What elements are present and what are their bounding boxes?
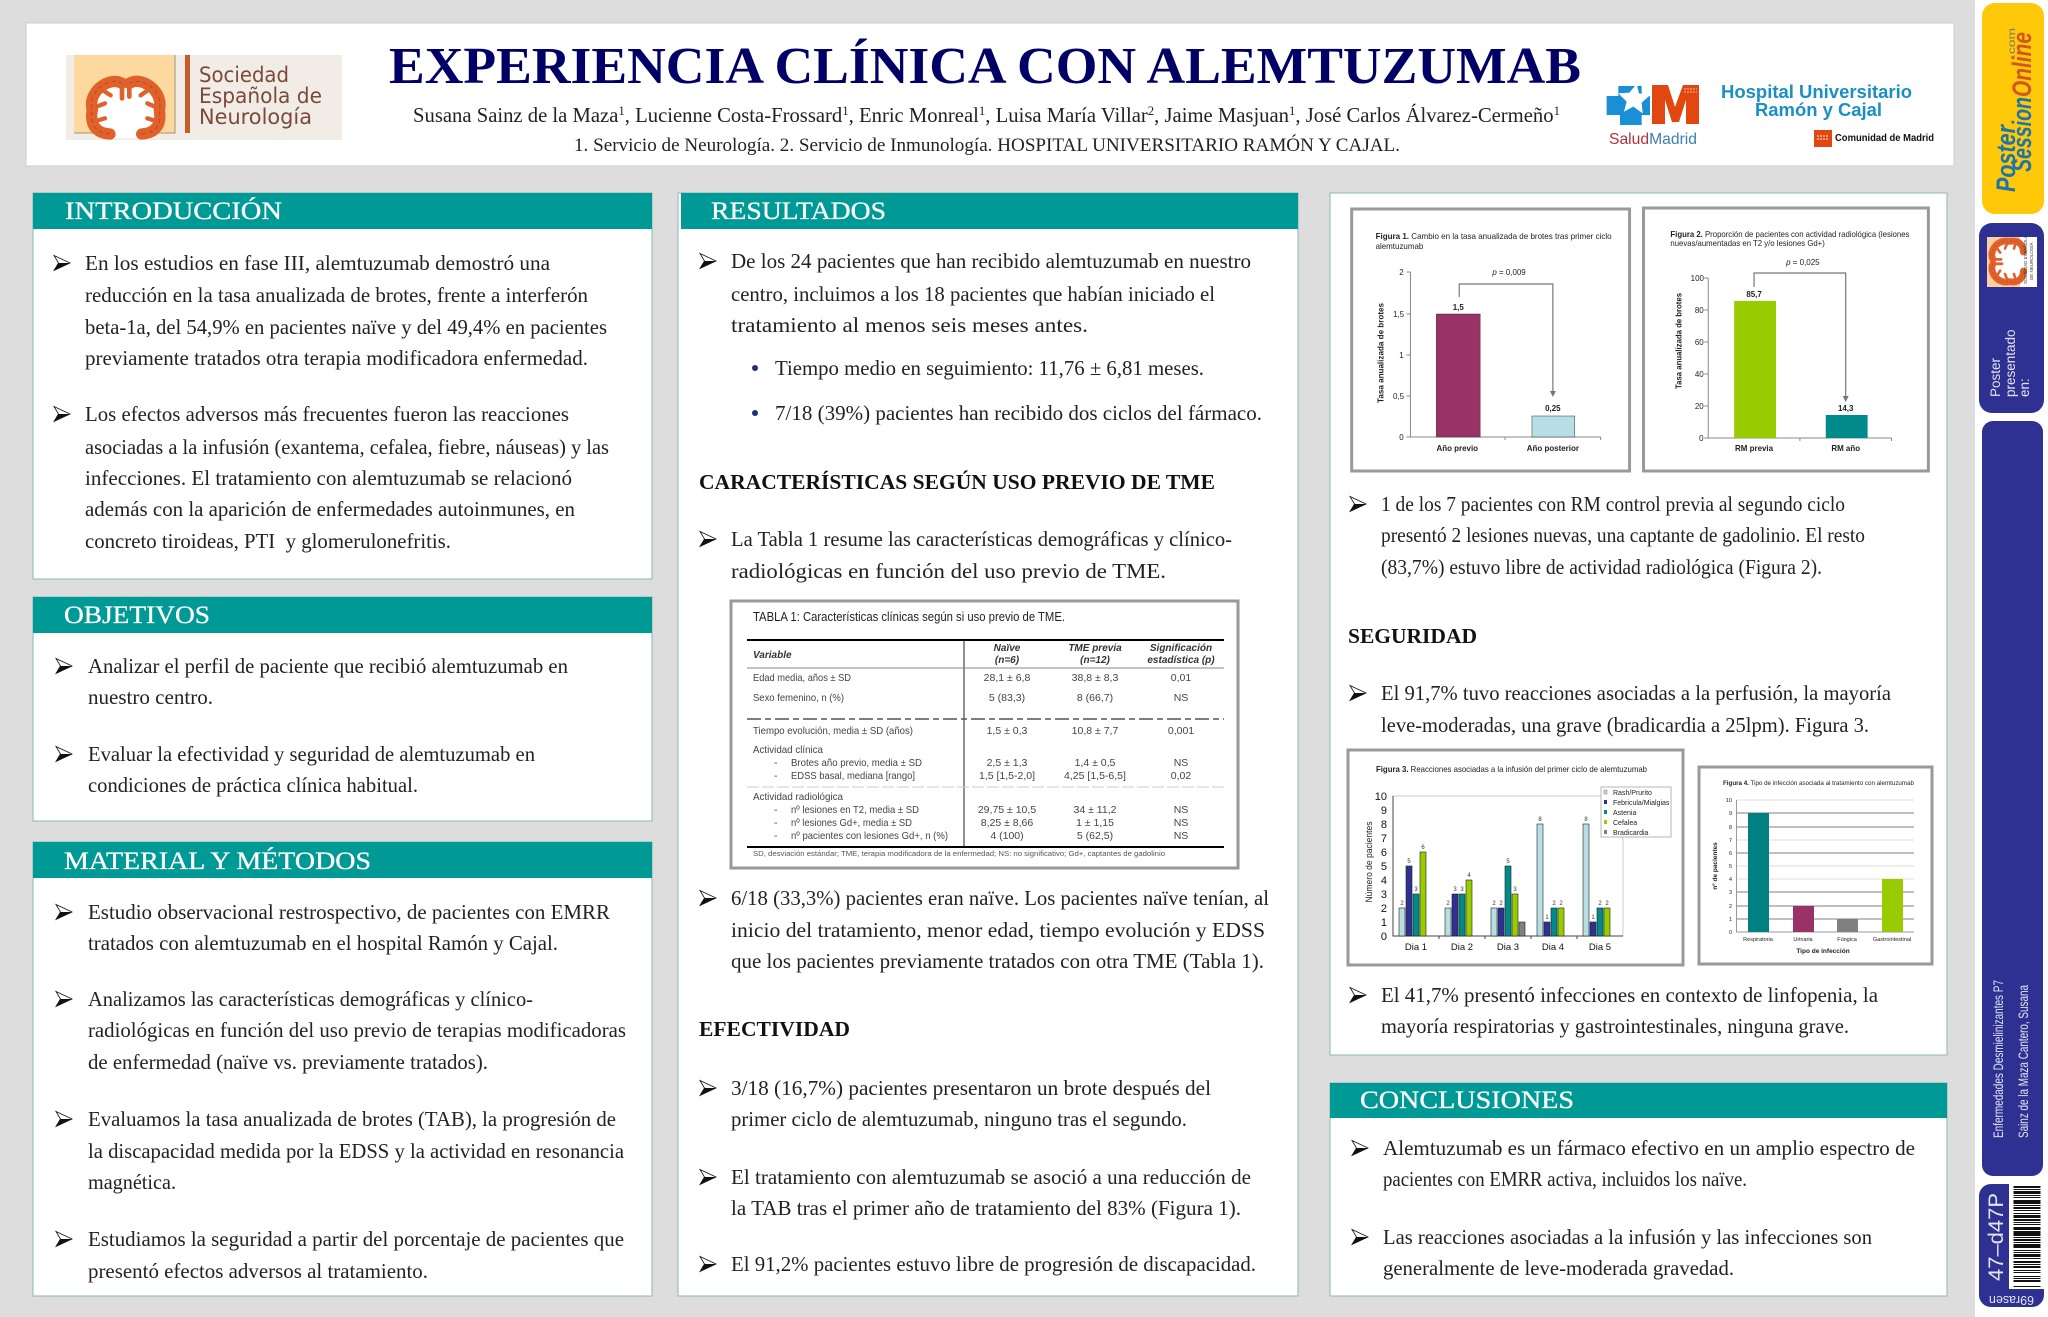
- sidebar: poster presentado en: presentado: [2003, 329, 2018, 397]
- chart: figura 3: 4: [1381, 875, 1387, 887]
- heading: introducción: [33, 193, 652, 229]
- text: conclusión 1: pacientes con EMRR activa, incluidos los naïve.: [1383, 1167, 1747, 1191]
- chart: figura 3: 2: [1446, 901, 1450, 907]
- text: pacientes naïve: [700, 886, 1269, 973]
- text: seguridad: leve-moderadas, una grave (bradicardia a 25lpm). Figura 3.: [1381, 713, 1869, 737]
- chart: figura 3: 8: [1381, 819, 1387, 831]
- chart: figura 4: Fúngica: [1837, 937, 1858, 943]
- sidebar: PosterSessionOnline badge: Online: [2007, 32, 2037, 97]
- text: método 3: magnética.: [88, 1170, 176, 1194]
- chart: figura 2: RM año: [1831, 444, 1860, 453]
- table 1: NS: [1174, 692, 1188, 704]
- logo: Hospital Universitario Ramón y Cajal: Ramón y Cajal: [1755, 100, 1882, 120]
- text: radiología: [1350, 492, 1865, 579]
- legend: figura 3: Bradicardia: [1613, 830, 1649, 837]
- table 1: 1,4 ± 0,5: [1075, 757, 1116, 769]
- chart: figura 3: 0: [1381, 931, 1387, 943]
- chart: figura 2: 20: [1695, 402, 1704, 411]
- sidebar: PosterSessionOnline badge: Session: [2007, 97, 2037, 172]
- table 1: 1,5 ± 0,3: [987, 725, 1028, 737]
- text: intro paragraph 2: concreto tiroideas, PTI y glomerulonefritis.: [85, 529, 451, 553]
- subheading: efectividad: EFECTIVIDAD: [699, 1017, 850, 1041]
- table 1: NS: [1174, 830, 1188, 842]
- heading: objetivos: [33, 597, 652, 633]
- chart: figura 1: 0,25: [1545, 404, 1561, 413]
- chart: figura 3: Dia 2: [1451, 942, 1473, 953]
- logo: Hospital Universitario Ramón y Cajal: Comunidad de Madrid: [1835, 133, 1934, 144]
- chart: figura 2: 60: [1695, 338, 1704, 347]
- logo: SaludMadrid: SaludMadrid: [1609, 131, 1697, 148]
- text: intro paragraph 2: infecciones. El tratamiento con alemtuzumab se relacionó: [85, 466, 572, 490]
- text: efectividad 1: primer ciclo de alemtuzumab, ninguno tras el segundo.: [731, 1107, 1187, 1131]
- sidebar: sesión y autora: [1982, 421, 2043, 1176]
- table 1: nº lesiones en T2, media ± SD: [791, 804, 919, 816]
- chart: figura 3: 8: [1538, 817, 1542, 823]
- table 1: 1,5 [1,5-2,0]: [979, 770, 1035, 782]
- chart: figura 3: Figura 3. Reacciones asociadas a la infusión del primer ciclo de alemtuzumab: [1376, 764, 1647, 774]
- text: método 3: la discapacidad medida por la EDSS y la actividad en resonancia: [88, 1139, 625, 1163]
- text: resultados paragraph: centro, incluimos a los 18 pacientes que habían iniciado el: [731, 282, 1215, 306]
- sidebar: PosterSessionOnline badge: [1982, 3, 2044, 214]
- chart: figura 4: 2: [1729, 904, 1732, 910]
- chart: figura 2: RM previa: [1735, 444, 1774, 453]
- chart: figura 4: 7: [1729, 838, 1732, 844]
- chart: figura 3: 3: [1381, 889, 1387, 901]
- table 1: NS: [1174, 804, 1188, 816]
- table 1: 8,25 ± 8,66: [981, 817, 1033, 829]
- authors: 1: [1554, 103, 1560, 118]
- text: método 3: [56, 1107, 625, 1194]
- chart: figura 2: p = 0,025: [1785, 258, 1820, 267]
- chart: figura 2: 0: [1699, 434, 1704, 443]
- legend: figura 3: Febricula/Mialgias: [1613, 800, 1670, 807]
- text: pacientes naïve: 6/18 (33,3%) pacientes eran naïve. Los pacientes naïve tenían, al: [731, 886, 1269, 910]
- text: conclusión 2: [1352, 1225, 1872, 1280]
- chart: figura 2: 40: [1695, 370, 1704, 379]
- text: intro paragraph 2: Los efectos adversos más frecuentes fueron las reacciones: [85, 402, 569, 426]
- sidebar: poster presentado en: DE NEUROLOGÍA: [2028, 242, 2034, 280]
- table 1: 28,1 ± 6,8: [984, 672, 1030, 684]
- heading: conclusiones: [1330, 1083, 1947, 1118]
- subheading: características: CARACTERÍSTICAS SEGÚN USO PREVIO DE TME: [699, 470, 1215, 494]
- chart: figura 1: Año previo: [1436, 444, 1478, 453]
- text: sub-bullets: Tiempo medio en seguimiento: 11,76 ± 6,81 meses.: [775, 356, 1204, 380]
- chart: figura 4: Tipo de infección: [1796, 948, 1850, 955]
- table 1: -: [774, 817, 778, 829]
- text: efectividad 2: la TAB tras el primer año de tratamiento del 83% (Figura 1).: [731, 1196, 1241, 1220]
- table 1: Brotes año previo, media ± SD: [791, 757, 922, 769]
- text: intro paragraph 1: previamente tratados otra terapia modificadora enfermedad.: [85, 346, 588, 370]
- text: método 1: tratados con alemtuzumab en el hospital Ramón y Cajal.: [88, 931, 558, 955]
- text: radiología: presentó 2 lesiones nuevas, una captante de gadolinio. El resto: [1381, 523, 1865, 547]
- table 1: 4 (100): [990, 830, 1024, 842]
- text: pacientes naïve: inicio del tratamiento, menor edad, tiempo evolución y EDSS: [731, 918, 1265, 942]
- heading: material y métodos: MATERIAL Y MÉTODOS: [64, 847, 371, 875]
- table 1: 34 ± 11,2: [1074, 804, 1117, 816]
- text: efectividad 1: [700, 1076, 1211, 1131]
- logo: Sociedad Española de Neurología: Española de: [199, 84, 322, 108]
- chart: figura 2: Tasa anualizada de brotes: [1674, 292, 1683, 389]
- chart: figura 2: 80: [1695, 306, 1704, 315]
- sidebar: poster presentado en: SOCIEDAD ESPAÑOLA: [2022, 235, 2028, 284]
- chart: figura 3: 2: [1559, 901, 1563, 907]
- chart: figura 4: 6: [1729, 851, 1732, 857]
- affiliations: 1. Servicio de Neurología. 2. Servicio de Inmunología. HOSPITAL UNIVERSITARIO RAMÓN Y CAJAL.: [574, 134, 1400, 156]
- panel: conclusiones: [1330, 1083, 1947, 1296]
- chart: figura 3: Dia 3: [1497, 942, 1519, 953]
- heading: introducción: INTRODUCCIÓN: [65, 197, 282, 225]
- chart: figura 4: Urinaria: [1793, 937, 1814, 943]
- chart: figura 4: 3: [1729, 890, 1732, 896]
- chart: figura 3: 5: [1506, 859, 1510, 865]
- text: intro paragraph 1: [54, 251, 607, 370]
- authors: , Jaime Masjuan: [1154, 103, 1290, 127]
- chart: figura 3: 2: [1400, 901, 1404, 907]
- text: método 3: Evaluamos la tasa anualizada de brotes (TAB), la progresión de: [88, 1107, 616, 1131]
- table 1: estadística (p): [1147, 655, 1215, 666]
- table 1: nº pacientes con lesiones Gd+, n (%): [791, 830, 948, 842]
- text: radiología: (83,7%) estuvo libre de actividad radiológica (Figura 2).: [1381, 555, 1822, 579]
- chart: figura 3: 2: [1492, 901, 1496, 907]
- sidebar: poster presentado en: Poster: [1988, 357, 2003, 397]
- table 1: [731, 601, 1238, 868]
- logo: Hospital Universitario Ramón y Cajal: Hospital Universitario: [1721, 82, 1912, 102]
- legend: figura 3: Rash/Prurito: [1613, 790, 1652, 797]
- sidebar: poster presentado en: [1979, 223, 2044, 413]
- chart: figura 3: 5: [1381, 861, 1387, 873]
- heading: resultados: [681, 193, 1298, 229]
- legend: figura 3: Astenia: [1613, 810, 1636, 817]
- text: método 4: Estudiamos la seguridad a partir del porcentaje de pacientes que: [88, 1227, 624, 1251]
- text: método 4: presentó efectos adversos al tratamiento.: [88, 1259, 428, 1283]
- chart: figura 3: 2: [1598, 901, 1602, 907]
- text: intro paragraph 2: [54, 402, 609, 553]
- text: intro paragraph 1: beta-1a, del 54,9% en pacientes naïve y del 49,4% en pacientes: [85, 315, 607, 339]
- header banner: [26, 23, 1954, 166]
- text: infecciones: El 41,7% presentó infecciones en contexto de linfopenia, la: [1381, 983, 1879, 1007]
- text: objetivo 2: condiciones de práctica clínica habitual.: [88, 773, 418, 797]
- text: resultados paragraph: tratamiento al menos seis meses antes.: [731, 313, 1088, 337]
- text: método 2: [56, 987, 626, 1074]
- table 1: nº lesiones Gd+, media ± SD: [791, 817, 912, 829]
- text: objetivo 2: Evaluar la efectividad y seguridad de alemtuzumab en: [88, 742, 535, 766]
- chart: figura 3: 7: [1381, 833, 1387, 845]
- table 1: Significación: [1150, 643, 1212, 654]
- table 1: 0,02: [1171, 770, 1191, 782]
- sidebar: barcode: [1979, 1184, 2044, 1308]
- text: efectividad 1: 3/18 (16,7%) pacientes presentaron un brote después del: [731, 1076, 1211, 1100]
- table 1: 8 (66,7): [1077, 692, 1113, 704]
- authors: 1: [618, 103, 625, 118]
- text: tabla 1 intro: radiológicas en función del uso previo de TME.: [731, 559, 1166, 583]
- title: EXPERIENCIA CLÍNICA CON ALEMTUZUMAB: [389, 37, 1581, 95]
- authors: 1: [979, 103, 985, 118]
- table 1: EDSS basal, mediana [rango]: [791, 770, 915, 782]
- text: infecciones: [1350, 983, 1879, 1038]
- chart: figura 1: 1,5: [1393, 310, 1405, 319]
- authors: 2: [1148, 103, 1154, 118]
- text: objetivo 2: [56, 742, 535, 797]
- chart: figura 2: 85,7: [1746, 290, 1762, 299]
- authors: , Luisa María Villar: [985, 103, 1148, 127]
- table 1: Naïve: [994, 643, 1021, 654]
- table 1: Tiempo evolución, media ± SD (años): [753, 725, 913, 737]
- text: método 1: Estudio observacional restrospectivo, de pacientes con EMRR: [88, 900, 610, 924]
- table 1: 1 ± 1,15: [1076, 817, 1114, 829]
- table 1: -: [774, 830, 778, 842]
- panel: objetivos: [33, 597, 652, 821]
- text: sub-bullets: 7/18 (39%) pacientes han recibido dos ciclos del fármaco.: [775, 401, 1262, 425]
- panel: resultados continuación: [1330, 193, 1947, 1055]
- table 1: 0,01: [1171, 672, 1191, 684]
- text: método 4: [56, 1227, 624, 1283]
- text: resultados paragraph: De los 24 pacientes que han recibido alemtuzumab en nuestro: [731, 249, 1251, 273]
- chart: figura 3: 10: [1375, 791, 1387, 803]
- sidebar: sesión y autora: Enfermedades Desmielinizantes P7: [1990, 980, 2006, 1138]
- chart: figura 3: Dia 4: [1542, 942, 1564, 953]
- chart: figura 3: 3: [1414, 887, 1418, 893]
- table 1: 5 (83,3): [989, 692, 1025, 704]
- authors: , Enric Monreal: [849, 103, 979, 127]
- chart: figura 3: Dia 5: [1589, 942, 1611, 953]
- chart: figura 4: 8: [1729, 825, 1732, 831]
- chart: figura 2: Figura 2. Proporción de pacientes con actividad radiológica (lesiones: [1670, 230, 1909, 239]
- table 1: 2,5 ± 1,3: [987, 757, 1028, 769]
- text: conclusión 2: generalmente de leve-moderada gravedad.: [1383, 1256, 1734, 1280]
- chart: figura 1: [1352, 209, 1630, 471]
- chart: figura 3: Dia 1: [1405, 942, 1427, 953]
- text: efectividad 2: El tratamiento con alemtuzumab se asoció a una reducción de: [731, 1165, 1251, 1189]
- chart: figura 4: 9: [1729, 811, 1732, 817]
- chart: figura 3: 3: [1453, 887, 1457, 893]
- text: método 2: Analizamos las características demográficas y clínico-: [88, 987, 533, 1011]
- legend: figura 3: [1601, 787, 1671, 837]
- table 1: 0,001: [1168, 725, 1194, 737]
- table 1: NS: [1174, 817, 1188, 829]
- chart: figura 3: 9: [1381, 805, 1387, 817]
- table 1: SD, desviación estándar; TME, terapia modificadora de la enfermedad; NS: no significativo; Gd+, captantes de gadolinio: [753, 849, 1165, 858]
- chart: figura 1: p = 0,009: [1491, 268, 1526, 277]
- chart: figura 3: 2: [1605, 901, 1609, 907]
- chart: figura 2: 14,3: [1838, 404, 1854, 413]
- chart: figura 3: 6: [1381, 847, 1387, 859]
- table 1: -: [774, 804, 778, 816]
- table 1: -: [774, 770, 778, 782]
- table 1: Actividad radiológica: [753, 791, 843, 803]
- legend: figura 3: Cefalea: [1613, 820, 1637, 827]
- table 1: (n=12): [1080, 655, 1111, 666]
- text: conclusión 1: Alemtuzumab es un fármaco efectivo en un amplio espectro de: [1383, 1136, 1915, 1160]
- table 1: TME previa: [1068, 643, 1122, 654]
- authors: Susana Sainz de la Maza: [413, 103, 622, 127]
- chart: figura 3: 8: [1584, 817, 1588, 823]
- chart: figura 4: Figura 4. Tipo de infección asociada al tratamiento con alemtuzumab: [1723, 781, 1915, 787]
- logo: Sociedad Española de Neurología: Neurología: [199, 105, 312, 129]
- chart: figura 3: Número de pacientes: [1364, 821, 1375, 902]
- chart: figura 1: 0: [1399, 433, 1404, 442]
- heading: resultados: RESULTADOS: [711, 198, 886, 225]
- text: efectividad 3: El 91,2% pacientes estuvo libre de progresión de discapacidad.: [731, 1252, 1256, 1276]
- authors: , José Carlos Álvarez-Cermeño: [1295, 103, 1554, 127]
- chart: figura 1: 2: [1399, 268, 1404, 277]
- chart: figura 2: 100: [1691, 274, 1704, 283]
- chart: figura 3: 2: [1381, 903, 1387, 915]
- table 1: (n=6): [995, 655, 1020, 666]
- chart: figura 1: alemtuzumab: [1376, 242, 1424, 251]
- table 1: Variable: [753, 650, 792, 661]
- authors: 1: [842, 103, 849, 118]
- chart: figura 3: 1: [1545, 915, 1549, 921]
- chart: figura 3: 6: [1421, 845, 1425, 851]
- text: método 1: [56, 900, 610, 955]
- panel: introducción: [33, 193, 652, 579]
- chart: figura 1: Tasa anualizada de brotes: [1377, 302, 1386, 403]
- text: método 2: de enfermedad (naïve vs. previamente tratados).: [88, 1050, 488, 1074]
- chart: figura 3: 5: [1407, 859, 1411, 865]
- text: tabla 1 intro: La Tabla 1 resume las características demográficas y clínico-: [731, 527, 1232, 551]
- chart: figura 3: 3: [1460, 887, 1464, 893]
- logo: SaludMadrid: [1607, 84, 1699, 148]
- sidebar: barcode: 69rasen: [1989, 1293, 2034, 1308]
- logo: Hospital Universitario Ramón y Cajal: [1721, 82, 1934, 147]
- sidebar: poster presentado en: en:: [2017, 378, 2032, 397]
- chart: figura 1: Año posterior: [1527, 444, 1579, 453]
- chart: figura 4: 0: [1729, 930, 1732, 936]
- text: infecciones: mayoría respiratorias y gastrointestinales, ninguna grave.: [1381, 1014, 1849, 1038]
- text: pacientes naïve: que los pacientes previamente tratados con otra TME (Tabla 1).: [731, 949, 1264, 973]
- heading: objetivos: OBJETIVOS: [64, 602, 210, 629]
- chart: figura 3: 2: [1499, 901, 1503, 907]
- chart: figura 1: 0,5: [1393, 392, 1405, 401]
- chart: figura 2: nuevas/aumentadas en T2 y/o lesiones Gd+): [1670, 239, 1825, 248]
- table 1: 5 (62,5): [1077, 830, 1113, 842]
- text: objetivo 1: [56, 654, 568, 709]
- logo: Sociedad Española de Neurología: [66, 55, 342, 140]
- sidebar: barcode: 47–d47P: [1985, 1193, 2008, 1281]
- heading: conclusiones: CONCLUSIONES: [1360, 1087, 1574, 1114]
- table 1: Sexo femenino, n (%): [753, 692, 844, 704]
- text: conclusión 1: [1352, 1136, 1915, 1191]
- text: radiología: 1 de los 7 pacientes con RM control previa al segundo ciclo: [1381, 492, 1845, 516]
- text: método 2: radiológicas en función del uso previo de terapias modificadoras: [88, 1018, 626, 1042]
- chart: figura 3: 1: [1591, 915, 1595, 921]
- table 1: 29,75 ± 10,5: [978, 804, 1036, 816]
- chart: figura 2: [1644, 208, 1928, 471]
- subheading: seguridad: SEGURIDAD: [1348, 624, 1477, 648]
- chart: figura 4: 10: [1726, 798, 1732, 804]
- text: efectividad 2: [700, 1165, 1251, 1220]
- text: intro paragraph 2: asociadas a la infusión (exantema, cefalea, fiebre, náuseas) y las: [85, 435, 609, 459]
- chart: figura 3: 3: [1513, 887, 1517, 893]
- heading: material y métodos: [33, 842, 652, 878]
- text: seguridad: El 91,7% tuvo reacciones asociadas a la perfusión, la mayoría: [1381, 681, 1892, 705]
- authors: , Lucienne Costa-Frossard: [625, 103, 843, 127]
- text: intro paragraph 2: además con la aparición de enfermedades autoinmunes, en: [85, 497, 575, 521]
- logo: Sociedad Española de Neurología: Sociedad: [199, 63, 289, 87]
- table 1: Actividad clínica: [753, 744, 823, 756]
- chart: figura 1: 1,5: [1453, 303, 1464, 312]
- text: objetivo 1: Analizar el perfil de paciente que recibió alemtuzumab en: [88, 654, 568, 678]
- chart: figura 4: 5: [1729, 864, 1732, 870]
- panel: resultados: [678, 193, 1298, 1296]
- chart: figura 1: Figura 1. Cambio en la tasa anualizada de brotes tras primer ciclo: [1376, 232, 1612, 241]
- table 1: 4,25 [1,5-6,5]: [1064, 770, 1126, 782]
- table 1: -: [774, 757, 778, 769]
- chart: figura 4: Gastrointestinal: [1873, 937, 1911, 943]
- text: intro paragraph 1: En los estudios en fase III, alemtuzumab demostró una: [85, 251, 551, 275]
- sidebar: PosterSessionOnline badge: Poster: [1991, 124, 2021, 192]
- chart: figura 4: [1699, 767, 1932, 964]
- chart: figura 4: 1: [1729, 917, 1732, 923]
- text: seguridad: [1350, 681, 1892, 737]
- chart: figura 4: 4: [1729, 877, 1732, 883]
- sidebar: sesión y autora: Sainz de la Maza Cantero, Susana: [2015, 985, 2031, 1138]
- table 1: NS: [1174, 757, 1188, 769]
- text: objetivo 1: nuestro centro.: [88, 685, 213, 709]
- text: intro paragraph 1: reducción en la tasa anualizada de brotes, frente a interferón: [85, 283, 588, 307]
- table 1: 10,8 ± 7,7: [1072, 725, 1118, 737]
- table 1: Edad media, años ± SD: [753, 672, 851, 684]
- chart: figura 3: 2: [1552, 901, 1556, 907]
- chart: figura 3: 1: [1381, 917, 1387, 929]
- chart: figura 3: 4: [1467, 873, 1471, 879]
- panel: material y métodos: [33, 842, 652, 1296]
- table 1: TABLA 1: Características clínicas según si uso previo de TME.: [753, 610, 1065, 624]
- table 1: 38,8 ± 8,3: [1072, 672, 1118, 684]
- text: conclusión 2: Las reacciones asociadas a la infusión y las infecciones son: [1383, 1225, 1872, 1249]
- chart: figura 4: nº de pacientes: [1712, 842, 1719, 890]
- chart: figura 1: 1: [1399, 351, 1404, 360]
- authors: 1: [1289, 103, 1295, 118]
- chart: figura 4: Respiratoria: [1743, 937, 1774, 943]
- text: sub-bullets: [752, 356, 1262, 425]
- chart: figura 3: [1348, 750, 1683, 965]
- text: resultados paragraph: [700, 249, 1251, 337]
- text: tabla 1 intro: [700, 527, 1232, 583]
- sidebar: PosterSessionOnline badge: .com: [2007, 28, 2018, 58]
